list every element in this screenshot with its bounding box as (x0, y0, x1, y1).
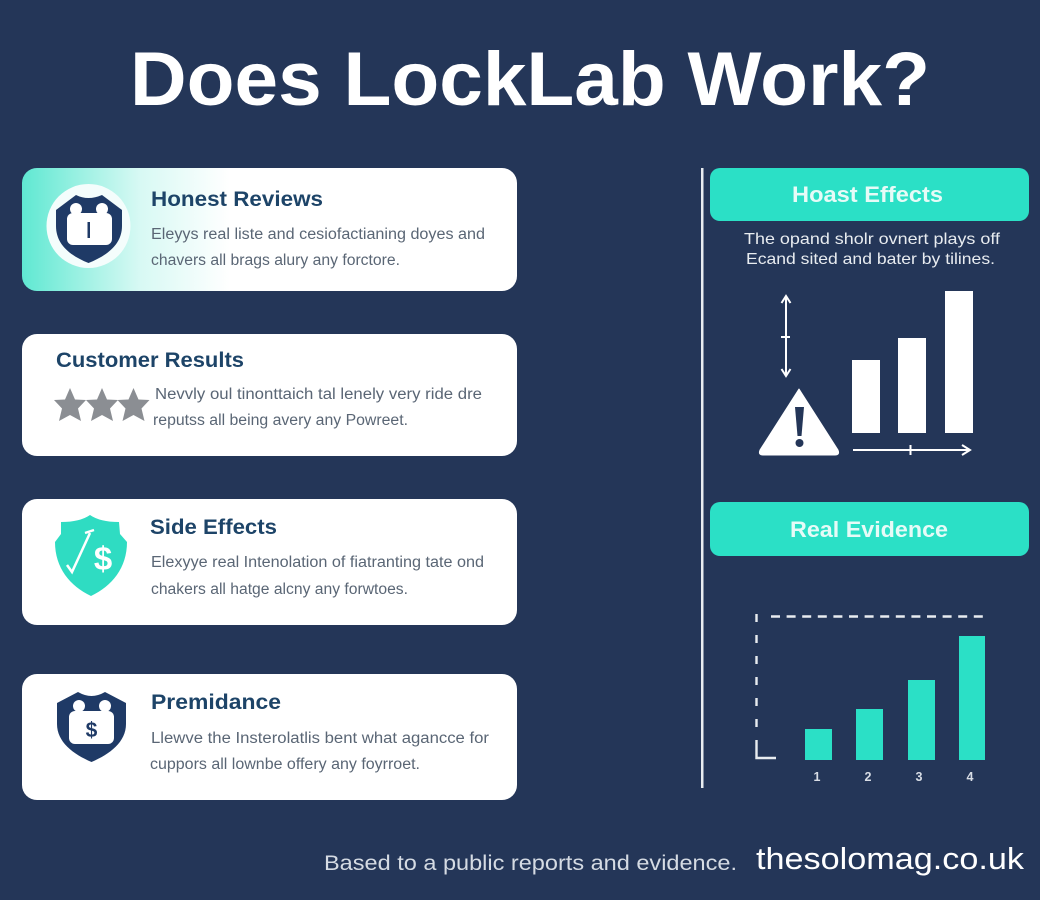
panel: honest reviews (22, 168, 517, 291)
heading pill: hoast effects: Hoast Effects (792, 182, 943, 207)
heading: customer results: Customer Results (56, 349, 244, 372)
bar chart: teal bars (805, 636, 985, 760)
icon: three stars (54, 388, 150, 421)
panel: premidance (22, 674, 517, 800)
title: Does LockLab Work? (130, 37, 930, 122)
icon: navy shield with dollar (57, 692, 126, 762)
panel: hoast effects (710, 168, 1029, 455)
text: premidance body: Llewve the Insterolatlis bent what agancce for (151, 730, 489, 747)
heading: honest reviews: Honest Reviews (151, 188, 323, 211)
text: customer results body: reputss all being avery any Powreet. (153, 412, 408, 429)
heading: premidance: Premidance (151, 691, 281, 714)
panel: side effects (22, 499, 517, 625)
text: honest reviews body: Eleyys real liste and cesiofactianing doyes and (151, 226, 485, 243)
watermark: thesolomag.co.uk (756, 841, 1025, 876)
chart labels: 3 (916, 770, 923, 784)
footer note: Based to a public reports and evidence. (324, 852, 737, 875)
text: hoast effects body: Ecand sited and bater by tilines. (746, 251, 995, 268)
text: side effects body: chakers all hatge alcny any forwtoes. (151, 581, 408, 598)
text: honest reviews body: chavers all brags alury any forctore. (151, 252, 400, 269)
arrow: vertical double (781, 296, 790, 376)
heading pill: real evidence (710, 502, 1029, 556)
divider (701, 168, 704, 788)
text: hoast effects body: The opand sholr ovnert plays off (744, 231, 1001, 248)
icon: navy shield with dollar: $ (86, 719, 98, 742)
bar chart: white bars (852, 291, 973, 433)
chart axes: dashed frame (756, 614, 989, 758)
heading pill: hoast effects (710, 168, 1029, 221)
heading: side effects: Side Effects (150, 516, 277, 539)
chart labels: 2 (865, 770, 872, 784)
chart labels: 4 (967, 770, 974, 784)
text: side effects body: Elexyye real Intenolation of fiatranting tate ond (151, 554, 484, 571)
chart labels: 1 (814, 770, 821, 784)
icon: teal shield with check and dollar: $ (94, 540, 112, 577)
heading pill: real evidence: Real Evidence (790, 517, 948, 542)
icon: teal shield with check and dollar (55, 515, 127, 596)
panel: real evidence (710, 502, 1029, 784)
text: customer results body: Nevvly oul tinonttaich tal lenely very ride dre (155, 386, 482, 403)
icon: warning triangle (759, 389, 839, 455)
chart labels (814, 770, 974, 784)
panel: customer results (22, 334, 517, 456)
icon: shield with calendar (46, 184, 130, 268)
text: premidance body: cuppors all lownbe offery any foyrroet. (150, 756, 420, 773)
arrow: horizontal (853, 445, 970, 455)
